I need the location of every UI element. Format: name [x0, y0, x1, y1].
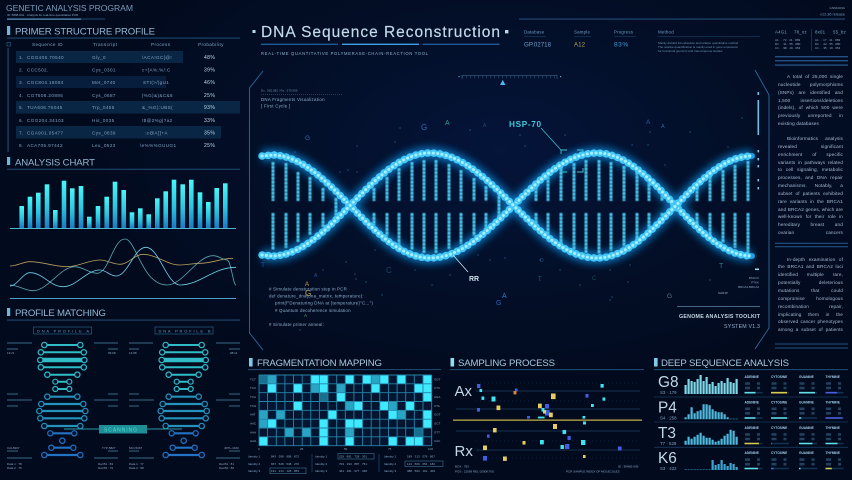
floating nucleotide letters — [261, 119, 724, 318]
heatmap axis labels: CTC — [434, 386, 441, 390]
heatmap grid — [259, 375, 432, 446]
readout block: top right: D1 · · 31 · 55 · 080 — [775, 42, 801, 46]
sequence labels — [658, 374, 679, 471]
fragment data tables: 191 · 213 · 128 · 853 — [271, 469, 299, 473]
fragments visualization caption: DNA Fragments Visualization — [261, 97, 325, 102]
label: DNA profile A: DNA PROFILE A — [37, 328, 89, 334]
text block: bioinformatics analysis: to cell signaling, metabolic — [778, 167, 843, 172]
fragment data tables: Identity 1 — [384, 454, 397, 458]
text block: bioinformatics analysis: hereditary breast and — [778, 222, 843, 227]
heatmap axis labels: GTT — [434, 430, 440, 434]
sampling label Ax: Ax — [454, 383, 473, 400]
panel: primer structure profile: 35% — [204, 130, 215, 136]
heatmap axis labels: 0 — [258, 447, 260, 451]
profile side readouts: Data 1 : 77 — [129, 462, 144, 466]
floating nucleotide letters: A — [483, 123, 487, 129]
nucleotide readouts: GUANINE — [799, 426, 814, 430]
heatmap axis labels: AAG — [250, 439, 257, 443]
heatmap axis labels: 50 — [344, 447, 348, 451]
sampling footer — [455, 464, 639, 474]
info strip: database, sample, progress, method: Sample — [574, 30, 590, 34]
sequence labels: S3 · 179 — [660, 390, 677, 395]
code annotation: # Simulate denaturation step in PCR — [269, 286, 347, 292]
nucleotide readouts — [744, 375, 844, 468]
sampling footer: BOX : 783 — [455, 464, 469, 468]
panel: primer structure profile: STI(>/|gU1 — [143, 80, 169, 85]
text block: BRCA examination: potentially deleterious — [778, 280, 843, 285]
text block: BRCA examination: compromise homologous — [778, 296, 843, 301]
nucleotide readouts: CYTOSINE — [771, 426, 787, 430]
code annotation: def denature_dna(dna_matrix, temperature): — [269, 294, 364, 298]
vertical status indicator: BRCA1.BRCA2 — [738, 285, 759, 289]
label: DNA profile B — [155, 327, 213, 334]
readout block: top right: A1 · · 17 · 41 · 883 — [815, 38, 841, 42]
panel: primer structure profile — [7, 26, 240, 152]
floating nucleotide letters: T — [538, 277, 542, 283]
sampling footer: PCR SAMPLE INDEX OF MOLECULES — [566, 470, 620, 474]
callout: HSP-70 — [509, 120, 583, 172]
floating nucleotide letters: G — [305, 135, 310, 142]
sampling data points — [477, 384, 622, 461]
fragment data tables: Identity 2 — [248, 462, 261, 466]
panel: primer structure profile: Cys_0839 — [92, 130, 116, 136]
sampling footer: ID : 38N82-009 — [618, 464, 639, 468]
info strip: database, sample, progress, method: for functional genomic and transcriptome studies — [658, 49, 723, 53]
readout block: top right: v12.36 release — [820, 12, 845, 16]
heatmap axis labels: AAT — [250, 412, 256, 416]
text block: SNP summary: (SNPs) are identified and — [778, 90, 843, 95]
panel: primer structure profile: 6. — [19, 118, 24, 123]
nucleotide readouts: THYMINE — [826, 375, 840, 379]
text block: SNP summary: 1,500 insertions/deletions — [778, 98, 843, 103]
profile side readouts: Data 1 : 78 — [7, 462, 22, 466]
floating nucleotide letters: A — [304, 313, 307, 318]
panel: primer structure profile: 48% — [204, 55, 215, 61]
program header — [6, 3, 133, 20]
text block: SNP summary: previously unreported in — [778, 113, 843, 118]
info strip: database, sample, progress, method: The relative quantification is mainly used in gene expression — [658, 45, 738, 49]
sampling label Rx: Rx — [454, 443, 473, 460]
nucleotide readouts: CYTOSINE — [771, 400, 787, 404]
heatmap axis labels: CAC — [434, 439, 441, 443]
text block: bioinformatics analysis: Bioinformatics analysis — [787, 136, 843, 141]
panel: primer structure profile: Sequence ID — [32, 42, 63, 47]
info strip: database, sample, progress, method: GP.02718 — [524, 42, 552, 48]
heatmap axis labels: TCT — [250, 378, 256, 382]
fragment data tables: 388 · 563 · 191 · 409 — [407, 469, 435, 473]
label: DNA profile A — [34, 327, 92, 334]
text block: bioinformatics analysis: rare variants in the BRCA1 — [778, 199, 843, 204]
profile side readouts — [7, 343, 240, 470]
panel: primer structure profile: CGG204.34103 — [27, 118, 64, 123]
nucleotide readouts: ADENINE — [744, 400, 759, 404]
panel: primer structure profile: 46% — [204, 80, 215, 86]
code annotation: # Simulate primer anneal: — [269, 322, 324, 327]
central frame brackets — [250, 70, 769, 350]
fragment data tables: Identity 3 — [315, 469, 328, 473]
text block: bioinformatics analysis: ovarian cancers — [778, 230, 843, 235]
panel: primer structure profile: |%G)&)&C&6 — [142, 93, 173, 98]
readout block: top right: GNS1004G — [829, 6, 846, 10]
nucleotide readouts: GUANINE — [799, 400, 814, 404]
text block: BRCA examination: the BRCA1 and BRCA2 loci — [778, 264, 843, 269]
fragment data tables: 657 · 528 · 548 · 276 — [271, 462, 299, 466]
floating nucleotide letters: A — [305, 282, 309, 288]
nucleotide readouts: ADENINE — [744, 426, 759, 430]
panel: primer structure profile: c+[A%;%/:C — [142, 68, 171, 72]
heatmap axis labels: TCG — [250, 404, 257, 408]
sequence labels: S4 · 258 — [660, 415, 677, 420]
panel: primer structure profile: Gly_0 — [92, 55, 106, 60]
text block: SNP summary: nucleotide polymorphisms — [778, 82, 843, 87]
profile side readouts: Dat B1 : 83 — [98, 462, 113, 466]
fragment data tables: 124 · 509 · 654 · 182 — [407, 462, 435, 466]
fragment data tables: Identity 3 — [384, 469, 397, 473]
panel: primer structure profile: :c@A[]+A — [145, 130, 168, 136]
panel: primer structure profile: 8. — [19, 143, 24, 148]
sampling tracks — [453, 383, 642, 458]
profile side readouts: TYP-5827 — [102, 446, 116, 450]
floating nucleotide letters: G — [496, 300, 501, 307]
panel: primer structure profile: Cys_0687 — [92, 93, 116, 98]
info strip: database, sample, progress, method: Mainly divided into absolute and relative quantitative method — [658, 41, 739, 45]
callout: RR — [453, 255, 479, 283]
panel: primer structure profile: 2. — [19, 68, 24, 72]
info strip: database, sample, progress, method: 83% — [614, 42, 629, 48]
panel: primer structure profile: 93% — [204, 105, 215, 111]
text block: SNP summary — [778, 74, 843, 126]
readout block: top right — [775, 6, 848, 66]
text block: bioinformatics analysis: revealed significant — [778, 144, 843, 149]
vertical status indicator: PTKK — [751, 280, 759, 284]
ruler with pointer — [458, 75, 561, 85]
callout: HSP-70: HSP-70 — [509, 120, 541, 129]
fragment data tables: 461 · 281 · 977 · 348 — [339, 469, 367, 473]
floating nucleotide letters: C — [386, 266, 392, 275]
profile side readouts: CAL8307 — [7, 446, 20, 450]
text block: bioinformatics analysis: well-known for their role in — [778, 214, 843, 219]
panel: fragmentation mapping — [248, 358, 443, 474]
fragment data tables: Identity 2 — [315, 462, 328, 466]
text block: SNP summary: (indels), of which 500 were — [778, 105, 843, 110]
main DNA double helix — [262, 153, 752, 258]
heatmap axis labels: 25 — [300, 447, 304, 451]
panel: primer structure profile: CGT508.20895 — [27, 93, 63, 98]
panel: primer structure profile: !$@2%g|?a2 — [142, 118, 173, 123]
text block: BRCA examination — [778, 257, 843, 332]
floating nucleotide letters: A — [314, 273, 318, 279]
heatmap axis labels: 100 — [428, 447, 433, 451]
sequence histograms — [686, 375, 737, 470]
panel: primer structure profile: ACA705.97442 — [27, 143, 63, 148]
text block: BRCA examination: mutations that could — [778, 288, 843, 293]
panel: primer structure profile: CCC502. — [27, 68, 49, 72]
panel: primer structure profile: Probability — [198, 42, 224, 47]
sequence labels: G8 — [658, 374, 679, 391]
text block: bioinformatics analysis: processes, and DNA repair — [778, 175, 843, 180]
fragment data tables: Identity 2 — [384, 462, 397, 466]
panel: primer structure profile: Trp_0455 — [92, 105, 115, 110]
readout block: top right: 55_bz — [833, 30, 846, 34]
readout block: top right: 78_xz — [794, 30, 807, 34]
heatmap axis labels: GGT — [434, 378, 441, 382]
nucleotide readouts: THYMINE — [826, 451, 840, 455]
floating nucleotide letters: C — [592, 276, 597, 282]
icon: DNA profile B helix — [158, 342, 209, 458]
label: DNA profile B: DNA PROFILE B — [158, 328, 211, 334]
profile side readouts: Dat B2 : 80 — [219, 466, 234, 470]
text block: BRCA examination: among a subset of patients — [778, 327, 843, 332]
title: DNA Sequence Reconstruction — [252, 24, 508, 56]
fragment data tables — [248, 454, 443, 474]
helix strand B — [262, 153, 752, 258]
sequence labels: S3 · 422 — [660, 466, 677, 471]
profile side readouts: 08:11 — [230, 351, 238, 355]
panel: primer structure profile: His_0035 — [92, 118, 115, 123]
readout block: top right: C1 · · 98 · 19 · 054 — [775, 46, 801, 50]
floating nucleotide letters: A — [445, 120, 450, 127]
info strip: database, sample, progress, method: Method — [658, 30, 674, 34]
nucleotide readouts: THYMINE — [826, 400, 840, 404]
code annotation: # Quantum decoherence simulation — [275, 308, 351, 313]
panel: fragmentation mapping: FRAGMENTATION MAPPING — [257, 358, 382, 369]
panel: primer structure profile: \e%%%GUUG1 — [140, 143, 176, 148]
panel: primer structure profile: Cys_0301 — [92, 68, 116, 72]
panel: primer structure profile: 7. — [19, 130, 24, 136]
profile side readouts: Dat B2 : 79 — [98, 466, 113, 470]
program header: ID: 5898-001 · Analysis for real-time quantitative PCR — [7, 13, 79, 17]
profile side readouts: Dat B1 : 81 — [219, 462, 234, 466]
panel: sampling process — [450, 358, 644, 474]
genome analysis toolkit label: GENOME ANALYSIS TOOLKIT — [679, 314, 761, 320]
fragment data tables: 843 · 598 · 998 · 872 — [271, 454, 299, 458]
panel: profile matching — [7, 308, 240, 470]
fragment data tables: 189 · 313 · 578 · 867 — [407, 454, 435, 458]
code annotation — [269, 286, 373, 327]
fragment data tables: 229 · 891 · 728 · 391 — [339, 454, 367, 458]
panel: primer structure profile: TUA606.75045 — [27, 105, 63, 110]
bar chart — [19, 180, 228, 228]
text block: BRCA examination: implicating them in the — [778, 312, 843, 316]
nucleotide readouts: GUANINE — [799, 451, 814, 455]
floating nucleotide letters: A — [661, 124, 665, 130]
heatmap axis labels: GGT — [434, 412, 441, 416]
text block: bioinformatics analysis: variants in pathways related — [778, 160, 843, 165]
text block: bioinformatics analysis — [778, 136, 843, 235]
heatmap axis labels: GCT — [434, 422, 440, 426]
text block: bioinformatics analysis: enrichment of specific — [778, 152, 843, 157]
text block: bioinformatics analysis: and BRCA2 genes, which are — [778, 207, 843, 212]
panel: primer structure profile: Transcript — [93, 42, 118, 47]
helix glow — [262, 153, 752, 258]
nucleotide readouts: CYTOSINE — [771, 451, 787, 455]
panel: primer structure profile: CGC804.18084 — [27, 80, 64, 85]
floating nucleotide letters: D — [540, 258, 544, 264]
profile side readouts: 13:21 — [7, 351, 15, 355]
panel: primer structure profile: 39% — [204, 68, 215, 74]
nucleotide readouts: ADENINE — [744, 375, 759, 379]
genome analysis toolkit label — [677, 306, 761, 330]
profile side readouts: JRTL-1400 — [224, 446, 239, 450]
callout: RR: RR — [469, 276, 479, 283]
panel: primer structure profile: 1. — [19, 55, 24, 60]
panel: deep sequence analysis — [654, 358, 848, 471]
title: DNA Sequence Reconstruction: REAL-TIME QUANTITATIVE POLYMERASE-CHAIN-REACTION TOOL — [261, 51, 429, 56]
text block: SNP summary: existing databases — [778, 121, 819, 126]
floating nucleotide letters: G — [667, 293, 672, 300]
panel: primer structure profile: 25% — [204, 93, 215, 99]
floating nucleotide letters: T — [719, 263, 724, 270]
text block: BRCA examination: observed cancer phenotypes — [778, 319, 843, 324]
profile side readouts: Data 2 : 75 — [7, 466, 22, 470]
vertical status indicator — [718, 92, 760, 295]
title: DNA Sequence Reconstruction: DNA Sequence Reconstruction — [261, 24, 500, 41]
text block: bioinformatics analysis: mechanisms. Notably, a — [778, 183, 843, 188]
heatmap axis labels: CTA — [434, 404, 440, 408]
panel: primer structure profile: Met_0740 — [92, 80, 116, 85]
panel: profile matching: PROFILE MATCHING — [15, 308, 106, 319]
nucleotide readouts: ADENINE — [744, 451, 759, 455]
program header: GENETIC ANALYSIS PROGRAM — [6, 3, 133, 13]
profile side readouts: MCI-5367 — [129, 446, 143, 450]
readout block: top right: D1 · · 22 · 55 · 080 — [815, 42, 841, 46]
code annotation: print(f"Denaturing DNA at {temperature}°C...") — [275, 300, 373, 306]
sequence labels: P4 — [658, 399, 677, 416]
panel: sampling process: SAMPLING PROCESS — [458, 358, 555, 369]
profile side readouts: Data 2 : 58 — [129, 466, 144, 470]
readout block: top right: 8x01 — [815, 30, 826, 34]
sampling footer: POS : 21569 REL 0000K7XS — [455, 470, 494, 474]
scanning indicator — [64, 425, 182, 434]
genome analysis toolkit label: SYSTEM V1.3 — [724, 324, 760, 330]
readout block: top right: A4G1 — [775, 30, 787, 34]
panel: primer structure profile: Process — [151, 42, 171, 47]
helix rungs — [273, 160, 748, 254]
heatmap axis labels: TCC — [250, 386, 257, 390]
fragments visualization caption: [ First Cycle ] — [261, 104, 290, 108]
fragment data tables: Identity 1 — [248, 454, 261, 458]
panel: primer structure profile: \ACA!GC[@! — [142, 55, 172, 60]
panel: primer structure profile: 5. — [19, 105, 24, 110]
panel: primer structure profile: CGG406.70540 — [27, 55, 64, 60]
info strip: database, sample, progress, method — [519, 19, 845, 53]
heatmap axis labels: TCA — [250, 395, 256, 399]
nucleotide readouts: CYTOSINE — [771, 375, 787, 379]
vertical status indicator: NHR3P — [718, 291, 728, 295]
vertical status indicator: PASCO — [749, 276, 760, 280]
text block: BRCA examination: recombination repair, — [778, 304, 843, 309]
text block: BRCA examination: identified multiple rare, — [778, 272, 843, 277]
info strip: database, sample, progress, method: Database — [524, 30, 545, 34]
heatmap axis labels: 75 — [388, 447, 392, 451]
panel: primer structure profile: 4. — [19, 93, 24, 98]
text block: bioinformatics analysis: subset of patients exhibited — [778, 191, 843, 196]
nucleotide readouts: GUANINE — [799, 375, 814, 379]
panel: analysis chart — [7, 157, 240, 299]
info strip: database, sample, progress, method: Progress — [614, 30, 634, 34]
panel: primer structure profile: Leu_0523 — [92, 143, 116, 148]
info strip: database, sample, progress, method: A12 — [574, 42, 586, 48]
sequence labels: T7 · 529 — [660, 441, 677, 446]
floating nucleotide letters: T — [261, 262, 265, 269]
panel: analysis chart: ANALYSIS CHART — [15, 158, 95, 168]
fragments visualization caption — [261, 88, 342, 108]
profile side readouts: 13:08 — [129, 351, 137, 355]
fragment data tables: Identity 3 — [248, 469, 261, 473]
profile side readouts: 09:08 — [108, 351, 116, 355]
fragment data tables: Identity 1 — [315, 454, 328, 458]
heatmap axis labels: AAA — [250, 430, 256, 434]
fragment data tables: 703 · 194 · 887 · 751 — [339, 462, 367, 466]
readout block: top right: A1 · · 72 · 41 · 883 — [775, 38, 801, 42]
helix strand A — [262, 153, 752, 258]
floating nucleotide letters: A — [646, 119, 651, 126]
fragments visualization caption: Dx : 562.082 / Rx : 570.595 — [261, 88, 298, 92]
panel: primer structure profile: 3. — [19, 80, 24, 85]
sequence labels: K6 — [658, 450, 677, 467]
panel: primer structure profile: CGA901.05477 — [27, 130, 64, 136]
heatmap axis labels: AAC — [250, 422, 257, 426]
panel: primer structure profile: PRIMER STRUCTURE PROFILE — [15, 26, 155, 38]
floating nucleotide letters: A — [502, 293, 507, 300]
sequence labels: T3 — [658, 425, 676, 442]
text block: BRCA examination: In-depth examination of — [787, 257, 843, 262]
panel: primer structure profile: 33% — [204, 118, 215, 124]
heatmap axis labels — [250, 378, 441, 451]
nucleotide readouts: THYMINE — [826, 426, 840, 430]
text block: SNP summary: A total of 25,000 single — [787, 74, 843, 79]
floating nucleotide letters: G — [421, 123, 427, 132]
floating nucleotide letters: G — [305, 289, 311, 298]
icon: DNA profile A helix — [37, 342, 88, 458]
scanning indicator: SCANNING — [104, 428, 137, 434]
particle field — [295, 118, 742, 330]
readout block: top right: C1 · · 35 · 19 · 054 — [815, 46, 841, 50]
panel: primer structure profile: &_%G):UBS( — [142, 105, 173, 110]
line chart — [10, 239, 236, 291]
panel: deep sequence analysis: DEEP SEQUENCE ANALYSIS — [661, 358, 789, 369]
heatmap axis labels: AGA — [434, 395, 440, 399]
panel: primer structure profile: 25% — [204, 143, 215, 149]
